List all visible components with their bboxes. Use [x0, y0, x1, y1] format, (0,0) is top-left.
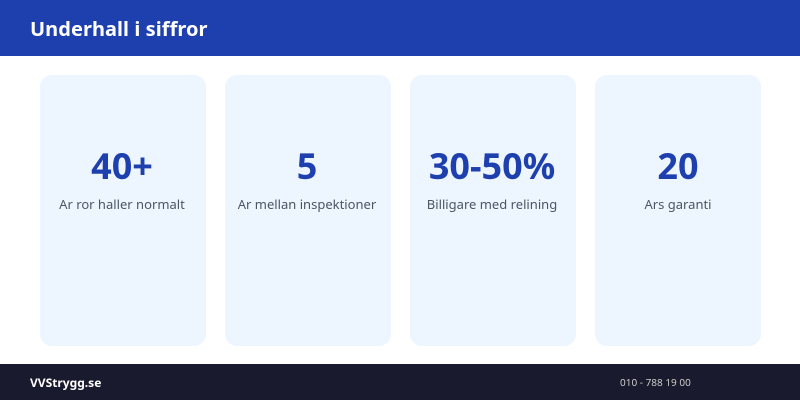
footer bar [0, 364, 800, 400]
header bar [0, 0, 800, 56]
label: inspection interval: Ar mellan inspektioner [238, 195, 376, 213]
brand name: VVStrygg.se [30, 374, 101, 391]
label: warranty: Ars garanti [644, 195, 712, 213]
panel: stat 5 [225, 75, 391, 346]
number: 40+: 40+ [91, 141, 153, 190]
title: Underhall i siffror [30, 15, 208, 42]
panel: stat 30-50% [410, 75, 576, 346]
number: 30-50%: 30-50% [429, 141, 555, 190]
phone number: 010 - 788 19 00 [620, 375, 691, 389]
label: pipe lifetime: Ar ror haller normalt [59, 195, 185, 213]
number: 20: 20 [657, 141, 699, 190]
panel: stat 20 [595, 75, 761, 346]
number: 5: 5 [297, 141, 317, 190]
panel: stat 40+ [40, 75, 206, 346]
label: relining savings: Billigare med relining [427, 195, 557, 213]
